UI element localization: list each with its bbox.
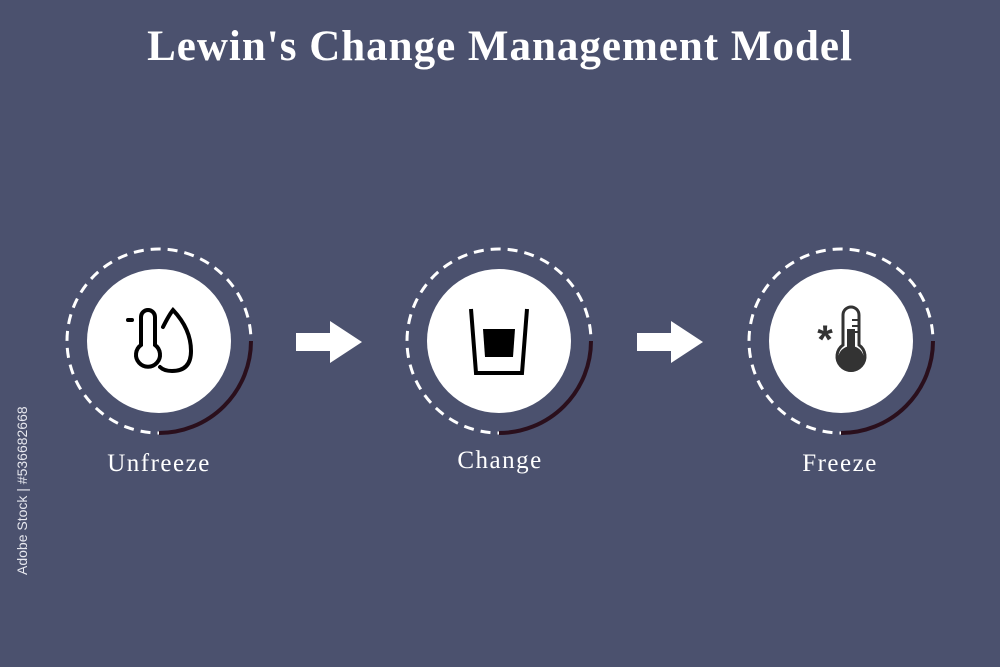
arrow 1 <box>296 321 362 363</box>
label: change: Change <box>457 447 543 474</box>
icon: glass <box>471 309 527 373</box>
icon: thermometer and drop <box>128 310 191 371</box>
arrow 2 <box>637 321 703 363</box>
icon: thermometer with snowflake: * <box>817 318 833 362</box>
label: unfreeze: Unfreeze <box>107 450 211 477</box>
label: freeze: Freeze <box>802 450 878 477</box>
step: freeze circle <box>749 249 933 433</box>
side stock id: Adobe Stock | #536682668 <box>14 406 30 575</box>
icon: thermometer with snowflake <box>817 307 865 372</box>
step: unfreeze circle <box>67 249 251 433</box>
step: change circle <box>407 249 591 433</box>
title: Lewin's Change Management Model <box>147 23 853 70</box>
